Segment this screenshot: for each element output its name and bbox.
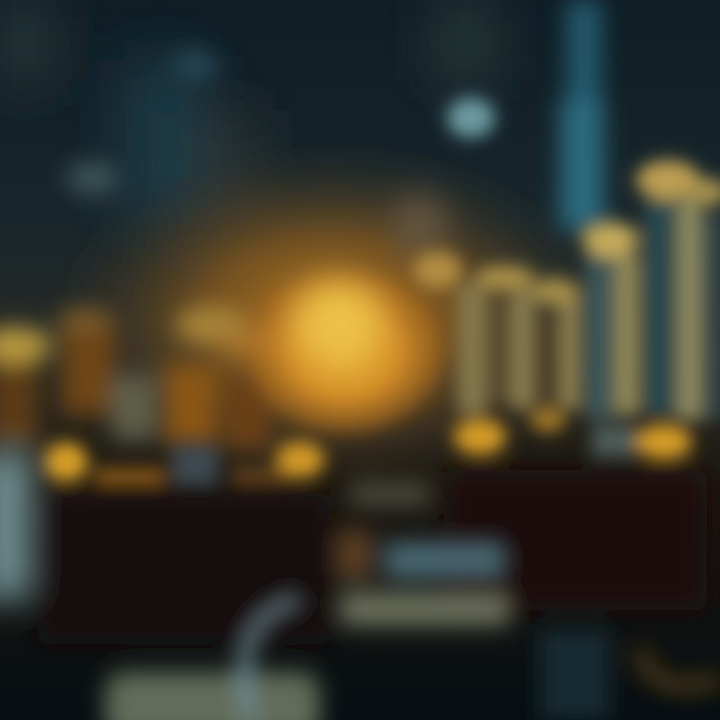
light spots in the sky (66, 51, 495, 255)
sky: dim teal streaks (0, 0, 490, 240)
right column group (414, 160, 720, 420)
blue vertical streak (560, 0, 604, 230)
dark plinths (38, 470, 707, 644)
foreground objects (105, 482, 720, 720)
left pale mass (0, 450, 32, 600)
left column group (0, 307, 285, 450)
base lights (44, 408, 692, 488)
brown halo behind glow (50, 140, 610, 490)
central glow (240, 264, 450, 440)
